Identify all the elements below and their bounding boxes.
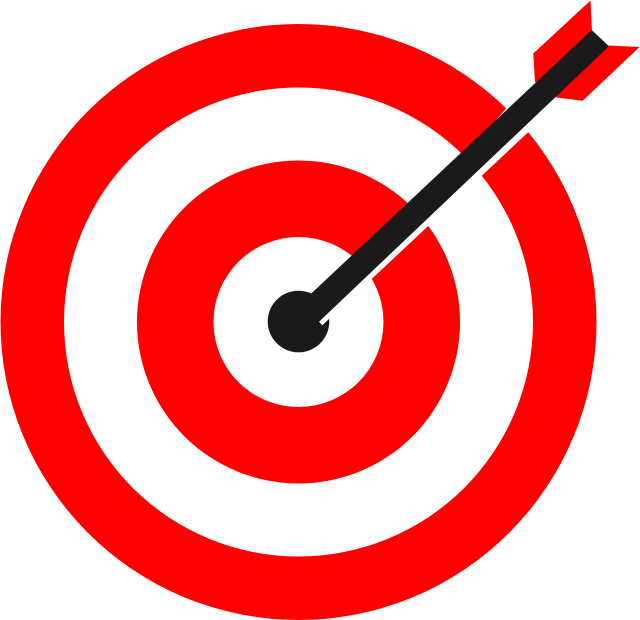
arrow shaft — [300, 30, 609, 322]
arrow fletching — [533, 0, 640, 101]
arrow shadow gap — [319, 70, 562, 325]
arrow hit point — [268, 291, 329, 352]
